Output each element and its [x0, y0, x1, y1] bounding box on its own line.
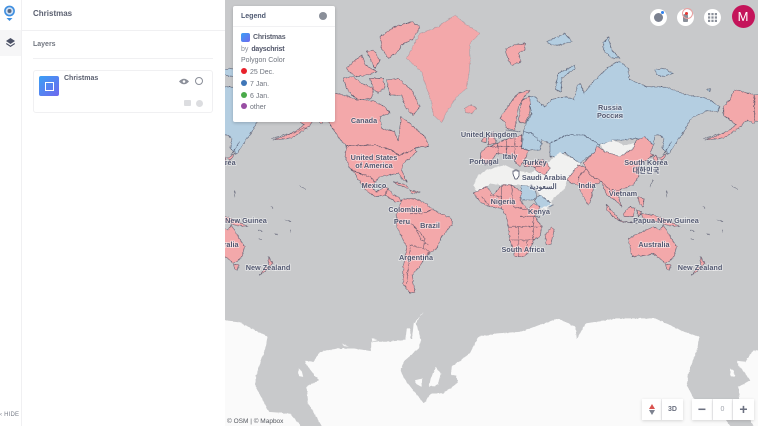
country labels: Papua New Guinea	[633, 216, 700, 225]
icon: message	[184, 100, 191, 106]
country labels: Vietnam	[609, 189, 638, 198]
button: zoom in: +	[739, 401, 748, 417]
button: zoom in	[733, 399, 754, 420]
legend subtitle: Polygon Color	[241, 57, 285, 64]
legend author: by dayschrist	[241, 46, 284, 53]
zoom value: 0	[721, 406, 724, 413]
country labels: Australia	[207, 240, 240, 249]
legend item: 6 Jan.: 6 Jan.	[250, 93, 269, 100]
wrapped world copy west	[0, 15, 306, 293]
attribution: © OSM | © Mapbox	[227, 418, 283, 425]
legend item: other: other	[250, 104, 266, 111]
region: Oceania	[628, 225, 705, 275]
button: 3D	[662, 399, 683, 420]
button: apps grid	[704, 8, 720, 26]
legend item: 25 Dec.: 25 Dec.	[250, 69, 274, 76]
legend title: Legend	[241, 13, 266, 20]
icon: legend collapse	[319, 12, 327, 20]
legend item: 25 Dec.	[241, 68, 274, 76]
antarctica	[222, 312, 758, 426]
country labels: India	[578, 181, 596, 190]
wrapped world copy east	[705, 15, 758, 293]
small islands	[650, 127, 738, 240]
country labels: Portugal	[469, 157, 499, 166]
country labels: United Kingdom	[461, 130, 518, 139]
button: 3D: 3D	[668, 406, 677, 413]
layers heading: Layers	[33, 41, 56, 48]
country labels: السعودية	[529, 182, 557, 191]
legend item: 6 Jan.	[241, 92, 269, 100]
country labels: New Zealand	[678, 263, 722, 272]
country labels: 대한민국	[633, 166, 660, 175]
country labels: South Korea	[624, 158, 669, 167]
region: white no-data areas	[473, 140, 637, 210]
legend panel	[233, 6, 335, 122]
country labels: Russia	[598, 103, 623, 112]
country labels: South Africa	[501, 245, 545, 254]
icon: north arrow	[642, 399, 662, 420]
legend layer name: Christmas	[253, 34, 285, 41]
land: Americas and Greenland	[273, 15, 480, 293]
user avatar	[732, 5, 754, 28]
left rail	[0, 0, 22, 426]
layer name: Christmas	[64, 75, 98, 82]
region: Africa	[473, 185, 554, 257]
side panel	[22, 0, 225, 426]
country labels: Canada	[351, 116, 378, 125]
country labels: United States	[351, 153, 397, 162]
icon: polygon layer	[39, 76, 59, 96]
legend item: 7 Jan.	[241, 80, 269, 88]
continents	[273, 15, 738, 293]
region: Asia	[535, 137, 680, 227]
legend item: other	[241, 103, 266, 111]
land: Eurasia, Africa and Oceania	[473, 33, 738, 275]
icon: target circle	[195, 77, 203, 85]
country labels: Peru	[394, 217, 410, 226]
hide button: ‹ HIDE	[0, 412, 19, 418]
icon: logo pin	[4, 6, 15, 21]
country labels: of America	[355, 161, 394, 170]
button: zoom out	[692, 399, 713, 420]
country labels: Brazil	[420, 221, 440, 230]
zoom value	[713, 399, 733, 420]
country labels: South Korea	[192, 158, 237, 167]
panel title: Christmas	[33, 9, 72, 18]
icon: layers tab	[0, 30, 21, 56]
region: Europe	[480, 43, 547, 167]
layer card	[33, 70, 213, 113]
control: zoom	[691, 399, 755, 422]
button: notifications	[676, 8, 694, 26]
button: compass	[650, 8, 666, 26]
country labels	[192, 103, 722, 272]
icon: hand cursor	[513, 170, 519, 179]
country labels: Россия	[597, 111, 623, 120]
country labels: Australia	[638, 240, 671, 249]
legend layer icon	[241, 33, 250, 42]
country labels: Papua New Guinea	[201, 216, 268, 225]
region: Russia and Eurasian 7 Jan countries	[520, 33, 720, 208]
button: zoom out: −	[698, 401, 706, 417]
country labels: Italy	[503, 152, 518, 161]
icon: info	[196, 100, 203, 107]
country labels: New Zealand	[246, 263, 290, 272]
country labels: Mexico	[362, 181, 387, 190]
country labels: Turkey	[523, 158, 548, 167]
legend item: 7 Jan.: 7 Jan.	[250, 81, 269, 88]
country labels: Kenya	[528, 207, 551, 216]
country labels: Argentina	[399, 253, 434, 262]
user avatar: M	[738, 9, 748, 24]
country labels: Saudi Arabia	[522, 173, 567, 182]
country labels: Nigeria	[491, 197, 516, 206]
icon: eye	[179, 78, 189, 84]
country labels: Colombia	[388, 205, 423, 214]
control: compass and 3D	[641, 399, 684, 422]
